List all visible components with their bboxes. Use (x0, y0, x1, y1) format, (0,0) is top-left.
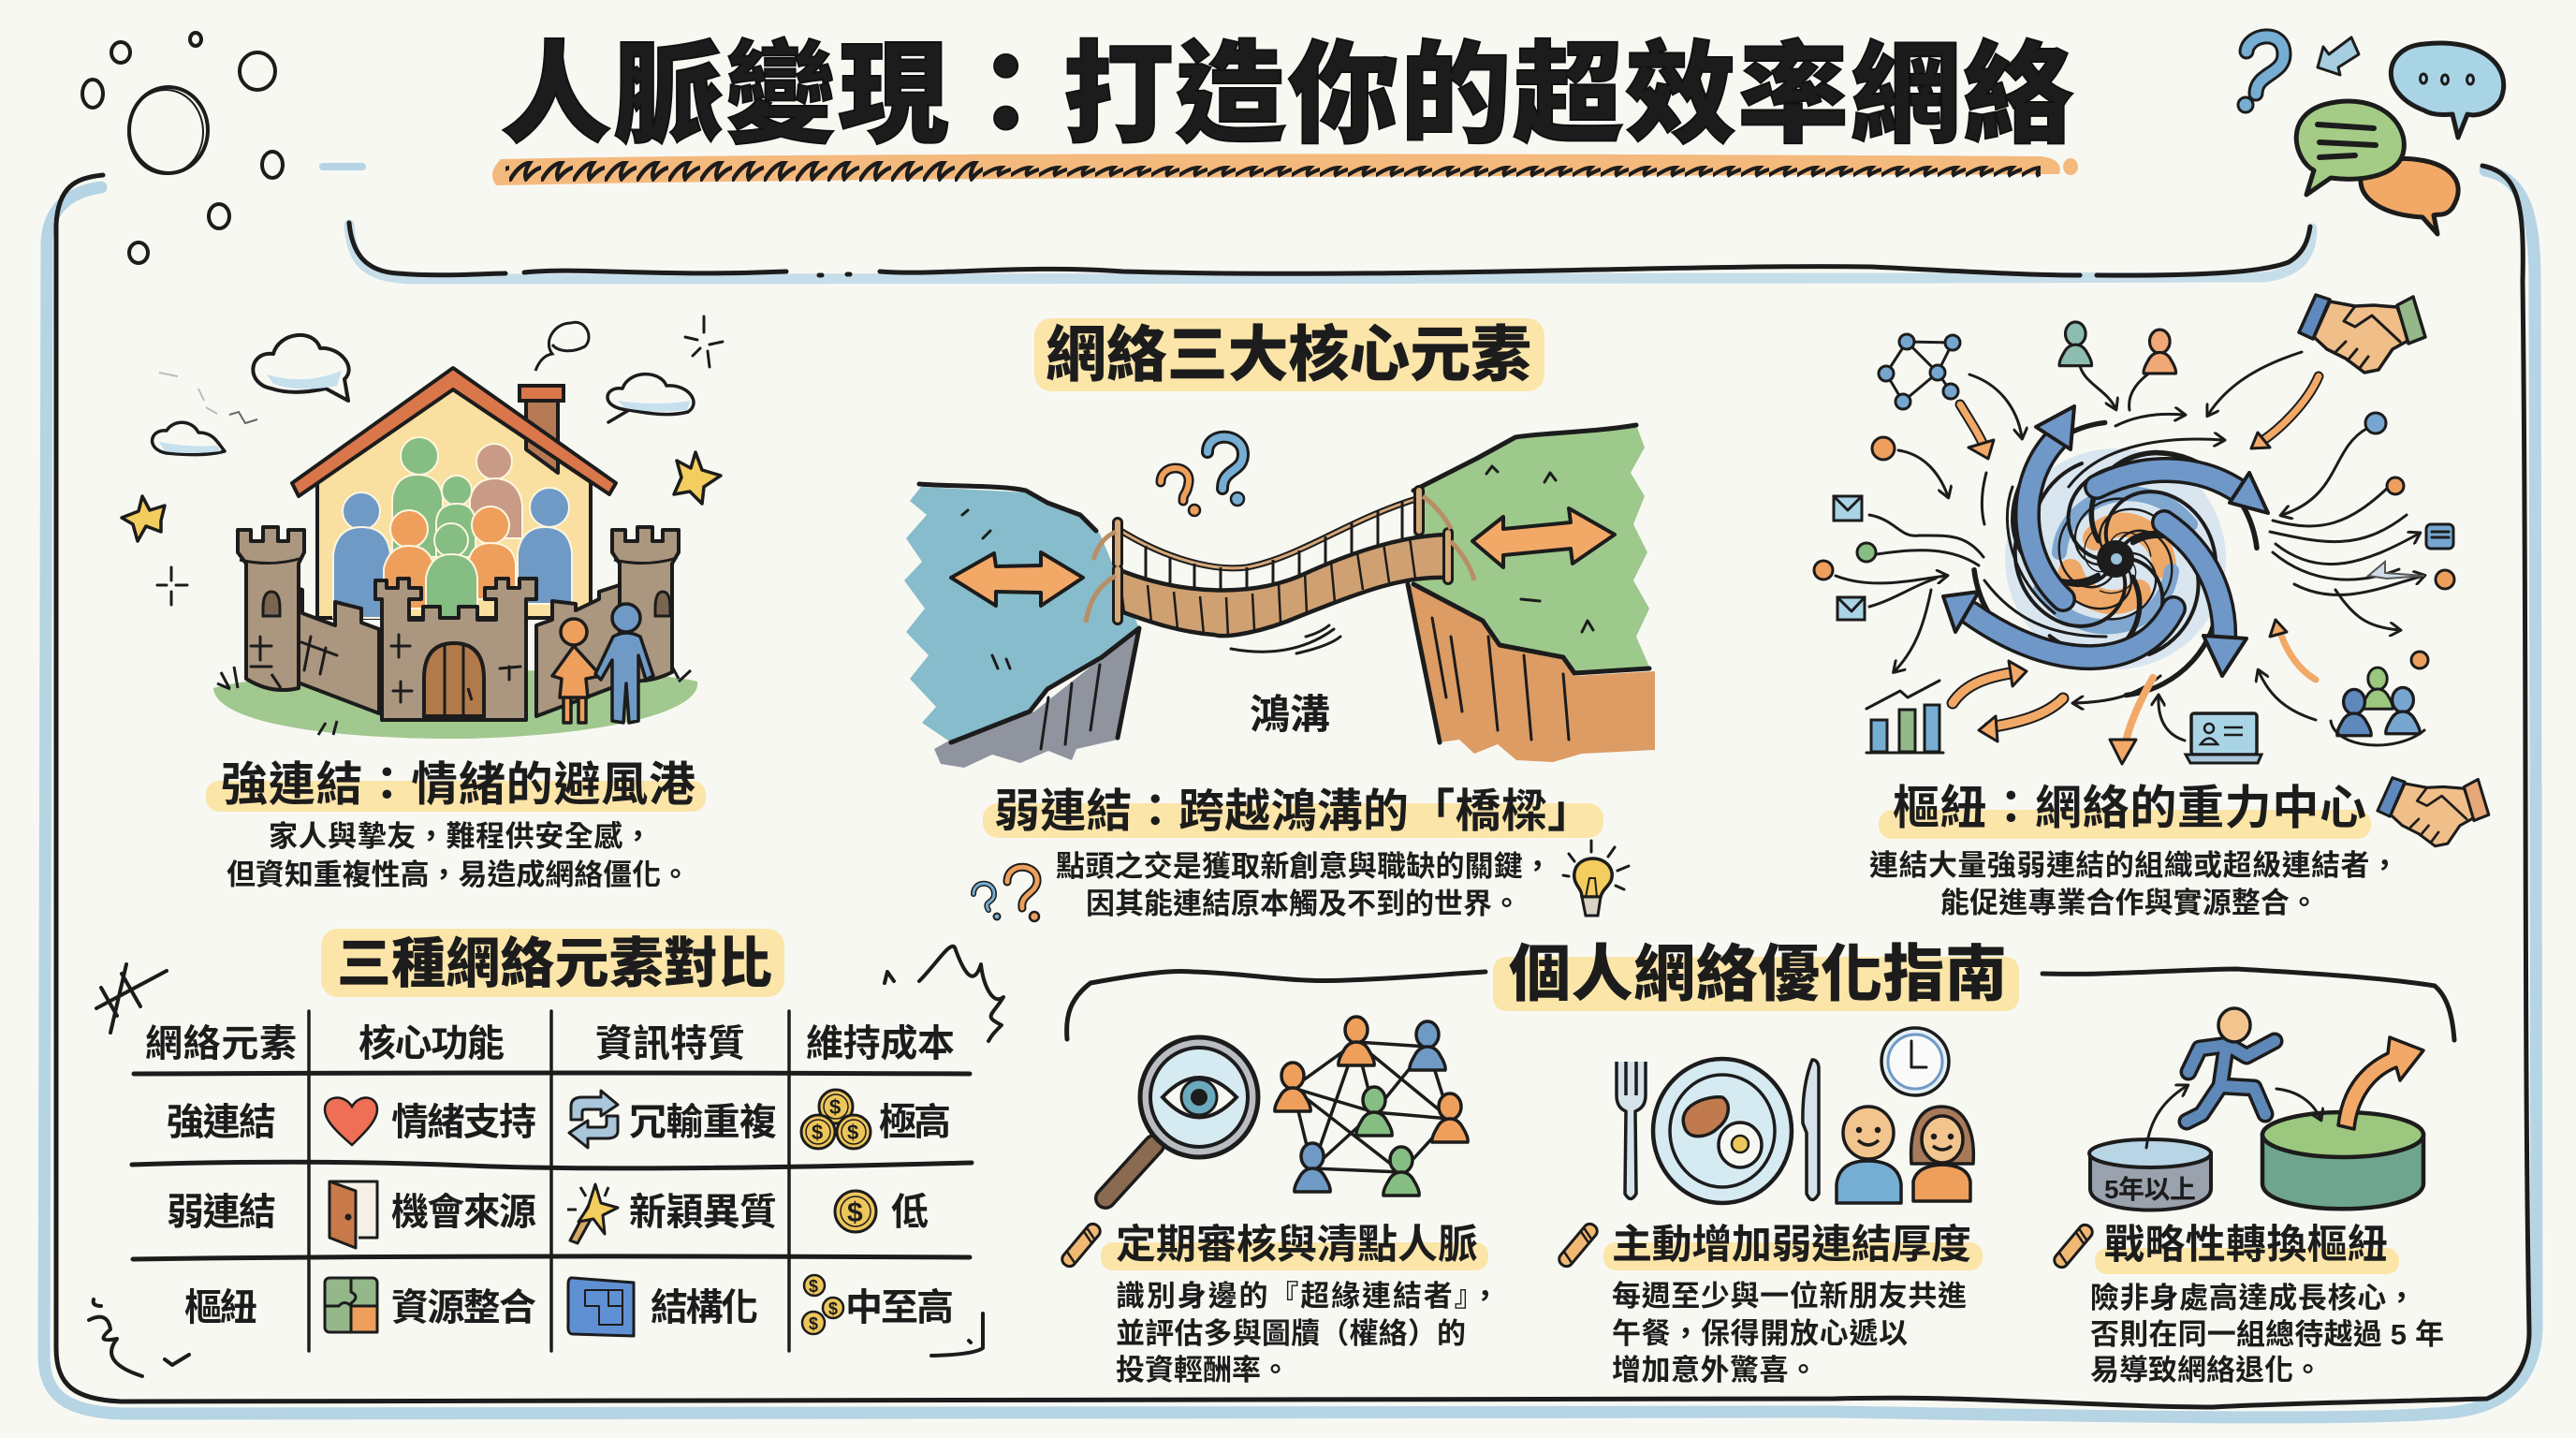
icon: small question marks (973, 867, 1039, 921)
table row: strong ties: 情緒支持 (391, 1102, 536, 1143)
icon: three coins: $ (829, 1095, 841, 1119)
left wall (285, 584, 379, 713)
illustration: castle house (213, 368, 697, 739)
bridge rails (1118, 498, 1419, 568)
icon: pencil (2052, 1222, 2095, 1270)
text: hub description: 連結大量強弱連結的組織或超級連結者， (1869, 849, 2399, 882)
icons: speech bubbles top right (2238, 37, 2504, 234)
text: strong ties description: 但資知重複性高，易造成網絡僵化。 (227, 858, 690, 891)
icon: small coins: $ (809, 1314, 818, 1333)
icon: cycle arrows (569, 1091, 618, 1148)
card title: 主動增加弱連結厚度 (1612, 1223, 1971, 1268)
icon: three coins: $ (847, 1121, 858, 1144)
icon: small coins (802, 1275, 843, 1334)
heading: comparison: 三種網絡元素對比 (337, 933, 772, 994)
icon: coin: $ (847, 1197, 863, 1228)
icon: plate with food (1653, 1059, 1792, 1203)
card title: 戰略性轉換樞紐 (2104, 1223, 2388, 1268)
heading: strong ties: 強連結：情緒的避風港 (221, 758, 695, 811)
panel: hub (1814, 295, 2489, 919)
card body: 險非身處高達成長核心， (2090, 1282, 2416, 1314)
text: weak ties description: 點頭之交是獲取新創意與職缺的關鍵， (1056, 850, 1552, 883)
icon: magnifier with eye (1105, 1037, 1258, 1198)
icon: heart (325, 1098, 377, 1145)
table row: weak ties: 低 (891, 1192, 929, 1233)
table grid (132, 1011, 972, 1351)
card: weak tie lunch (1557, 1028, 1983, 1387)
children in front (552, 604, 653, 723)
icon: running person (2187, 1008, 2275, 1122)
table header: 網絡元素 (145, 1023, 297, 1064)
text: strong ties description: 家人與摯友，難程供安全感， (269, 820, 652, 853)
text: strong ties description (227, 820, 690, 891)
table row: strong ties (167, 1090, 951, 1149)
decoration: bubbles top left (82, 33, 366, 263)
card body (1116, 1280, 1500, 1387)
card body (2090, 1282, 2444, 1387)
table row: hub (184, 1275, 954, 1336)
heading: hub: 樞紐：網絡的重力中心 (1893, 782, 2366, 834)
table row: strong ties: 極高 (879, 1102, 951, 1143)
icon: knife (1803, 1060, 1819, 1200)
card body: 並評估多與圖牘（權絡）的 (1116, 1317, 1466, 1350)
icon: network graph (1879, 334, 1960, 409)
icon: pencil (1557, 1221, 1600, 1269)
icon: fork (1617, 1062, 1646, 1198)
bracket line (1067, 969, 2454, 1040)
icon: meeting group (2331, 652, 2428, 745)
spiral lines (1956, 405, 2275, 712)
icon: puzzle (325, 1278, 377, 1332)
towers (238, 527, 304, 690)
heading: weak ties: 弱連結：跨越鴻溝的「橋樑」 (994, 786, 1593, 837)
table row: weak ties: 機會來源 (391, 1192, 536, 1233)
illustration: rope bridge over chasm (904, 425, 1655, 768)
card body: 增加意外驚喜。 (1612, 1354, 1818, 1387)
icons: hub contacts (1814, 322, 2454, 620)
table row: weak ties (167, 1181, 929, 1248)
question marks (1208, 437, 1243, 489)
table row: weak ties: 弱連結 (167, 1192, 276, 1233)
title: 人脈變現：打造你的超效率網絡 (501, 34, 2073, 157)
icon: small coins: $ (809, 1277, 818, 1296)
card body: 易導致網絡退化。 (2090, 1354, 2322, 1387)
card: regular audit (1060, 1017, 1500, 1387)
icon: magic wand star (567, 1184, 618, 1243)
icon: laptop (2186, 713, 2261, 763)
people inside house (333, 437, 572, 623)
panel: personal network optimization guide (1060, 939, 2454, 1387)
card body: 投資輕酬率。 (1116, 1354, 1290, 1387)
grass tufts (217, 667, 691, 735)
decoration: scribbles around table (89, 946, 1003, 1376)
table row: hub: 中至高 (845, 1287, 954, 1328)
card body (1612, 1280, 1967, 1387)
table header: 核心功能 (359, 1023, 505, 1064)
panel: weak ties (904, 425, 1655, 921)
icon: small cylinder (2089, 1139, 2211, 1210)
label: chasm: 鴻溝 (1250, 693, 1330, 738)
orange swirl (2071, 525, 2164, 602)
table row: weak ties: 新穎異質 (629, 1192, 777, 1233)
arrow: orange growth (2338, 1037, 2423, 1129)
title underline (492, 154, 2078, 185)
table row: hub: 樞紐 (184, 1287, 257, 1328)
arrow (1472, 508, 1615, 567)
table row: strong ties: 強連結 (167, 1102, 276, 1143)
icon: people network (1275, 1017, 1468, 1196)
icon: clock (1881, 1028, 1949, 1095)
heading: guide: 個人網絡優化指南 (1509, 939, 2007, 1008)
thick blue arrows (1970, 440, 2242, 657)
orange arrows (1953, 376, 2319, 755)
panel: comparison table (89, 929, 1003, 1376)
arrow (951, 552, 1083, 606)
text: hub description: 能促進專業合作與實源整合。 (1940, 887, 2319, 919)
card title: 定期審核與清點人脈 (1116, 1223, 1478, 1268)
icon: bar chart (1866, 681, 1943, 753)
icon: small coins: $ (828, 1299, 838, 1318)
icon: door (329, 1181, 377, 1248)
card body: 每週至少與一位新朋友共進 (1612, 1280, 1967, 1313)
icon: three coins: $ (812, 1121, 823, 1144)
icon: light bulb (1563, 841, 1629, 916)
blue swirl bands (2041, 493, 2190, 626)
card body: 否則在同一組總待越過 5 年 (2090, 1318, 2444, 1351)
icon: handshake bottom (2378, 778, 2489, 846)
card: strategic hub switch (2052, 1008, 2444, 1387)
table row: hub: 資源整合 (391, 1287, 536, 1328)
table row: hub: 結構化 (651, 1287, 758, 1328)
card body: 午餐，保得開放心遞以 (1612, 1317, 1908, 1350)
arrow (2146, 1086, 2187, 1148)
clouds, stars and sparkles (122, 316, 723, 605)
icon: blueprint (568, 1278, 634, 1336)
illustration: vortex (1943, 405, 2275, 712)
label: five years: 5年以上 (2104, 1175, 2196, 1204)
heading: three core elements: 網絡三大核心元素 (1046, 320, 1531, 389)
icon: two friends (1837, 1107, 1973, 1203)
table row: strong ties: 冗輸重複 (629, 1102, 777, 1143)
text: weak ties description: 因其能連結原本觸及不到的世界。 (1086, 888, 1521, 920)
icon: three coins (801, 1090, 871, 1149)
arrow (2276, 1089, 2320, 1119)
icon: pencil (1060, 1221, 1103, 1269)
gatehouse (375, 579, 536, 720)
card body: 識別身邊的『超緣連結者』， (1116, 1280, 1500, 1313)
icon: question mark (2247, 37, 2284, 94)
text: hub description (1869, 849, 2399, 919)
thin inflow arrows (1836, 352, 2423, 741)
icon: handshake top (2299, 295, 2425, 373)
icon: big cylinder (2262, 1112, 2423, 1209)
table header: 維持成本 (806, 1023, 955, 1064)
text: weak ties description (1056, 850, 1552, 920)
table header (145, 1023, 955, 1064)
table header: 資訊特質 (595, 1023, 745, 1064)
panel: strong ties (122, 316, 723, 891)
icon: coin (835, 1191, 876, 1232)
